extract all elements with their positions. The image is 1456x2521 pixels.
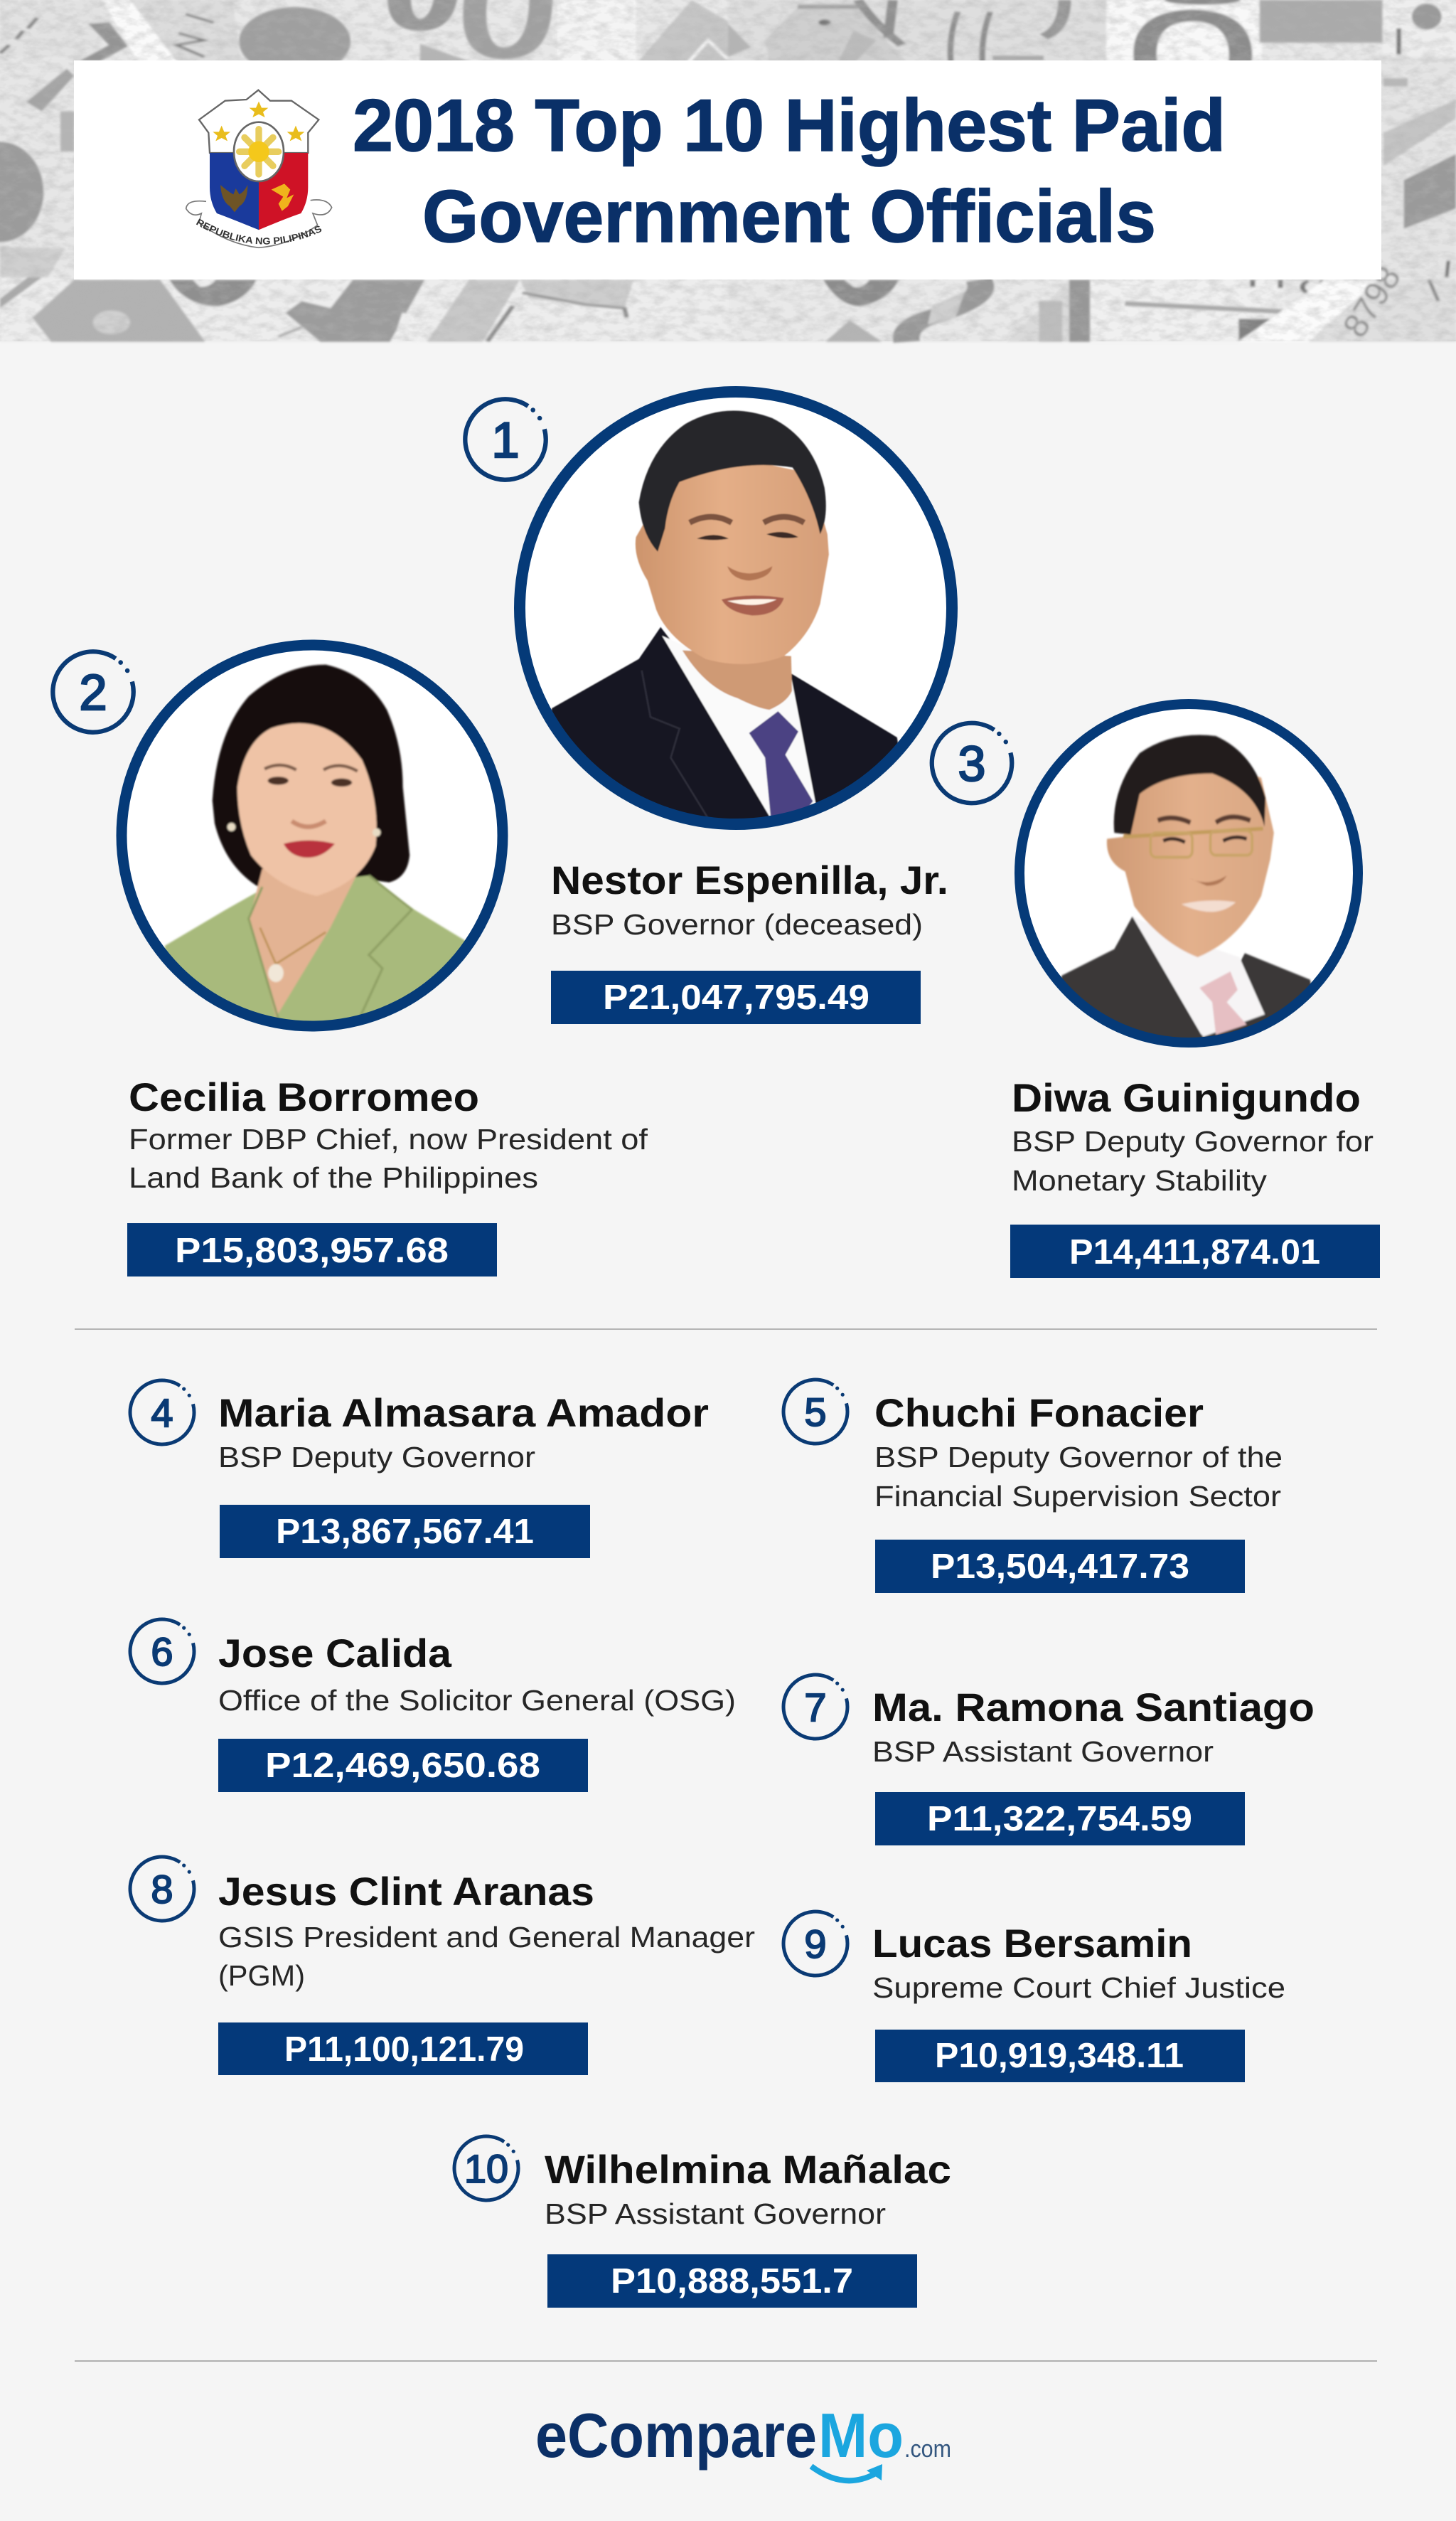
salary bar: P14,411,874.01: [1069, 1233, 1320, 1272]
panel: official 5: [783, 1380, 1283, 1593]
rank badge 5: 5: [804, 1390, 827, 1434]
panel: official 9: [783, 1912, 1285, 2082]
panel: official 7: [783, 1675, 1315, 1845]
salary bar: P21,047,795.49: [603, 979, 869, 1017]
rank badge 2: 2: [79, 664, 107, 720]
salary bar: [218, 1739, 588, 1792]
salary bar: P10,919,348.11: [935, 2037, 1184, 2075]
name: Cecilia Borromeo: [129, 1075, 479, 1119]
logo: eCompareMo.com: [535, 2400, 951, 2480]
position: GSIS President and General Manager: [218, 1921, 755, 1954]
header: white title box: [74, 60, 1381, 279]
rank badge 10: 10: [464, 2146, 508, 2191]
panel: official 6: [130, 1619, 736, 1792]
panel: official 3: [932, 704, 1380, 1278]
rank badge 5: [783, 1380, 847, 1444]
salary bar: [218, 2022, 588, 2075]
name: Ma. Ramona Santiago: [872, 1685, 1315, 1729]
position: BSP Deputy Governor of the: [874, 1441, 1283, 1473]
logo: eCompareMo.com: eCompare: [535, 2400, 817, 2471]
rank badge 8: 8: [151, 1867, 173, 1912]
name: Nestor Espenilla, Jr.: [551, 858, 948, 902]
position: BSP Governor (deceased): [551, 908, 923, 941]
rank badge 7: [783, 1675, 847, 1739]
position: Supreme Court Chief Justice: [872, 1971, 1285, 2004]
name: Chuchi Fonacier: [874, 1390, 1204, 1435]
logo: eCompareMo.com: .com: [904, 2436, 951, 2463]
salary bar: P11,322,754.59: [927, 1800, 1192, 1838]
salary bar: P13,867,567.41: [276, 1513, 534, 1551]
position: Monetary Stability: [1012, 1164, 1268, 1197]
position: Office of the Solicitor General (OSG): [218, 1684, 736, 1717]
rank badge 7: 7: [804, 1685, 827, 1729]
position: BSP Assistant Governor: [545, 2197, 886, 2230]
rank badge 8: [130, 1857, 194, 1921]
position: [218, 1921, 755, 1992]
icon: smile arrow: [811, 2464, 882, 2480]
portrait: Cecilia Borromeo: [122, 645, 503, 1032]
rank badge 3: [932, 723, 1012, 803]
icon: Philippine coat of arms seal: REPUBLIKA NG PILIPINAS: [196, 219, 321, 245]
position: (PGM): [218, 1959, 305, 1992]
position: Financial Supervision Sector: [874, 1480, 1281, 1513]
name: Maria Almasara Amador: [218, 1390, 709, 1435]
header: banknote collage banner: 8798: [1336, 260, 1408, 344]
salary bar: P13,504,417.73: [931, 1547, 1189, 1586]
rank badge 4: [130, 1380, 194, 1444]
rank badge 9: 9: [804, 1922, 827, 1966]
position: BSP Assistant Governor: [872, 1735, 1214, 1768]
salary bar: [875, 1540, 1245, 1593]
salary bar: P15,803,957.68: [175, 1232, 449, 1270]
rank badge 6: [130, 1619, 194, 1683]
portrait: Nestor Espenilla: [520, 392, 952, 845]
header: banknote collage banner: [0, 0, 1456, 344]
panel: official 8: [130, 1857, 755, 2075]
position: BSP Deputy Governor: [218, 1441, 535, 1473]
position: [1012, 1125, 1374, 1197]
salary bar: [127, 1223, 497, 1277]
rank badge 4: 4: [151, 1390, 173, 1435]
title: [353, 85, 1226, 258]
portrait: Diwa Guinigundo: [1019, 704, 1358, 1067]
position: BSP Deputy Governor for: [1012, 1125, 1374, 1158]
panel: official 1: [465, 392, 952, 1024]
name: Diwa Guinigundo: [1012, 1075, 1361, 1120]
logo: eCompareMo.com: Mo: [818, 2400, 904, 2471]
salary bar: [1010, 1225, 1380, 1278]
salary bar: [547, 2254, 917, 2308]
title: 2018 Top 10 Highest Paid: [353, 85, 1226, 167]
rank badge 9: [783, 1912, 847, 1976]
rank badge 10: [454, 2136, 518, 2200]
name: Jesus Clint Aranas: [218, 1869, 594, 1914]
position: Former DBP Chief, now President of: [129, 1123, 648, 1156]
rank badge 3: 3: [958, 736, 985, 792]
salary bar: P10,888,551.7: [611, 2262, 853, 2301]
salary bar: P12,469,650.68: [265, 1747, 540, 1785]
salary bar: P11,100,121.79: [284, 2030, 524, 2069]
panel: official 2: [53, 645, 648, 1277]
position: [874, 1441, 1283, 1513]
name: Jose Calida: [218, 1631, 452, 1675]
title: Government Officials: [422, 176, 1156, 258]
rank badge 1: 1: [491, 412, 520, 468]
salary bar: [875, 2030, 1245, 2082]
panel: official 4: [130, 1380, 709, 1558]
name: Lucas Bersamin: [872, 1921, 1192, 1966]
position: Land Bank of the Philippines: [129, 1161, 538, 1194]
salary bar: [551, 971, 921, 1024]
rank badge 6: 6: [151, 1629, 173, 1674]
icon: Philippine coat of arms seal: [185, 89, 333, 249]
salary bar: [220, 1505, 590, 1558]
name: Wilhelmina Mañalac: [545, 2147, 951, 2192]
position: [129, 1123, 648, 1194]
rank badge 2: [53, 651, 134, 732]
panel: official 10: [454, 2136, 951, 2308]
rank badge 1: [465, 399, 546, 480]
salary bar: [875, 1792, 1245, 1845]
